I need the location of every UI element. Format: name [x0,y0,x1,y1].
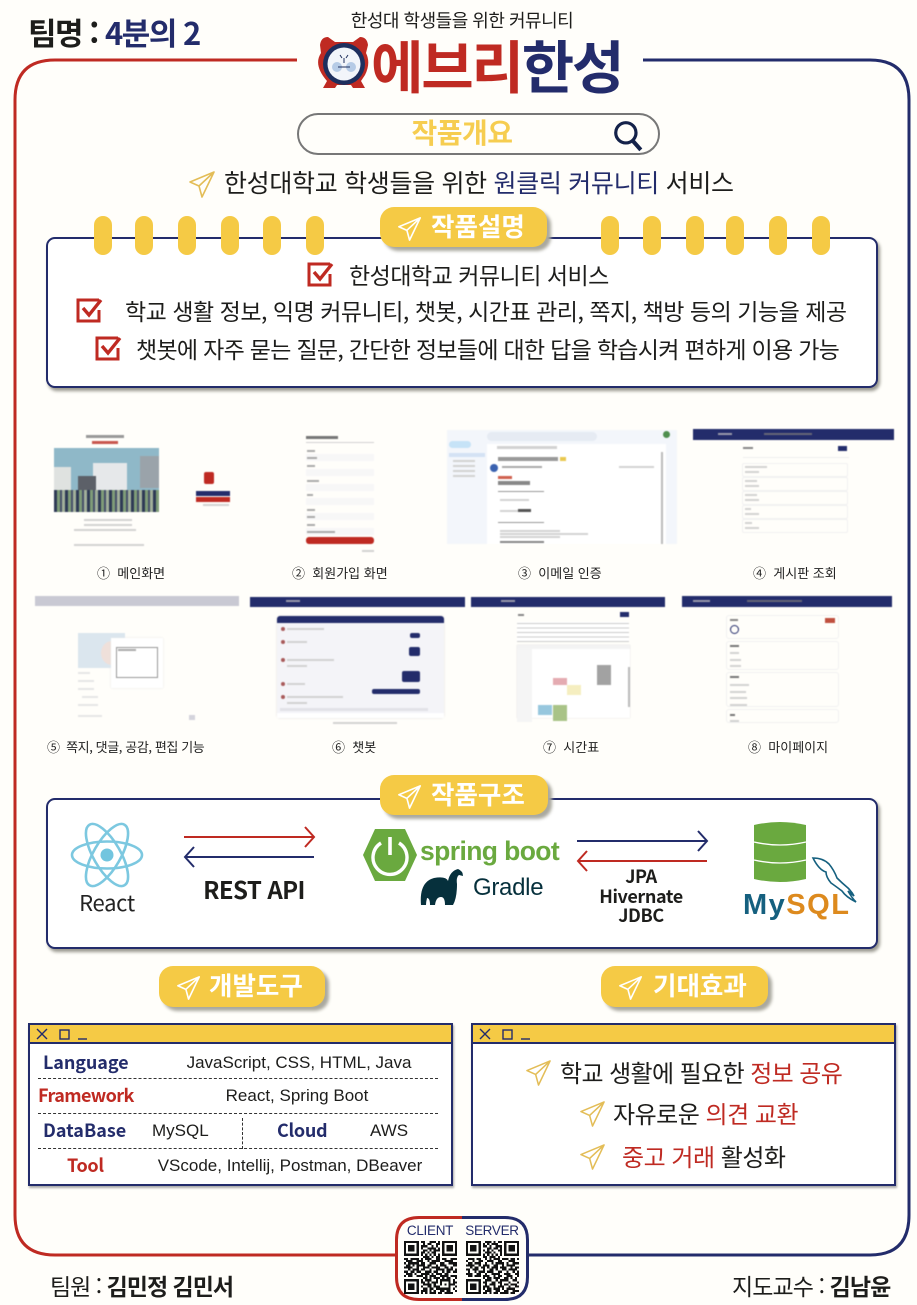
check item 3 [96,331,839,365]
screenshot 3: email [447,430,677,544]
label: React: React [79,886,135,918]
label: client: CLIENT [407,1223,453,1238]
QR code: server [466,1241,519,1294]
section heading: architecture: 작품구조 [431,775,525,812]
value: tool: VScode, Intellij, Postman, DBeaver [158,1156,422,1175]
caption 7: ⑦ 시간표 [543,737,599,756]
label: persistence stack [599,863,683,928]
value: framework: React, Spring Boot [226,1086,368,1105]
window title bar [473,1025,894,1044]
section heading: description: 작품설명 [431,207,525,244]
value: language: JavaScript, CSS, HTML, Java [187,1053,411,1072]
screenshot 6: chatbot [250,597,465,726]
panel: dev tools window [28,1023,453,1186]
caption 4: ④ 게시판 조회 [753,563,837,582]
label: persistence stack: JDBC [618,902,664,928]
icon: paper plane [580,1101,605,1127]
section heading: description [380,207,547,247]
row: framework: Framework [38,1082,134,1108]
label: REST API: REST API [203,871,305,906]
icon: Gradle elephant [420,869,463,905]
label: Gradle: Gradle [473,874,543,901]
panel: expected effects window [471,1023,896,1186]
arrow: result [576,850,707,872]
icon: magnifier [614,121,642,152]
icon: paper plane [398,785,422,809]
effect 1: 학교 생활에 필요한 정보 공유 [560,1054,842,1089]
icon: paper plane [177,976,200,1000]
search box heading [297,113,660,155]
text: 학교 생활 정보, 익명 커뮤니티, 챗봇, 시간표 관리, 쪽지, 책방 등의 기능을 제공 [125,293,847,327]
row: cloud: Cloud [277,1117,327,1143]
screenshot 1: main [28,431,232,551]
screenshot 8: my page [682,596,892,723]
section heading: dev tools: 개발도구 [209,966,303,1003]
label: server: SERVER [465,1223,519,1238]
icon: React logo [70,822,144,888]
screenshot 7: timetable [471,597,665,722]
advisor: 지도교수 : 김남윤 [732,1268,890,1302]
caption 6: ⑥ 챗봇 [332,737,376,756]
panel: architecture [46,798,878,949]
screenshot 4: board [693,429,894,541]
row: language: Language [43,1049,128,1075]
section heading: expected effects [601,966,768,1007]
tagline: 한성대학교 학생들을 위한 원클릭 커뮤니티 서비스 [224,164,734,200]
icon: paper plane [526,1060,551,1086]
window title bar [30,1025,451,1044]
icon: check [96,336,122,360]
icon: check [308,262,334,286]
label: persistence stack: JPA [625,863,657,889]
binder rings [94,216,830,255]
icon: clock mascot logo [318,37,368,88]
check item 1 [308,257,609,291]
text: 한성대학교 커뮤니티 서비스 [349,257,609,291]
arrow: query [577,830,708,852]
value: database: MySQL [152,1121,209,1140]
heading: project overview: 작품개요 [411,112,513,152]
title: 에브리한성 [371,23,622,105]
icon: paper plane [189,171,215,198]
caption 1: ① 메인화면 [97,563,165,582]
caption 5: ⑤ 쪽지, 댓글, 공감, 편집 기능 [47,737,204,756]
label: persistence stack: Hivernate [599,882,683,908]
icon: database cylinder [754,822,806,882]
screenshot 5: note [35,596,239,729]
row: database: DataBase [43,1117,126,1143]
section heading: architecture [380,775,548,815]
QR code: client [404,1241,457,1294]
arrow: response [184,846,314,868]
arrow: request [184,826,316,848]
icon: MySQL dolphin [812,857,856,903]
effect 3: 중고 거래 활성화 [622,1138,786,1173]
icon: check [76,298,102,322]
icon: paper plane [398,217,422,241]
caption 8: ⑧ 마이페이지 [748,737,828,756]
effect 2: 자유로운 의견 교환 [613,1095,798,1130]
section heading: dev tools [159,966,325,1007]
label: spring boot: spring boot [420,836,559,866]
check item 2 [76,293,847,327]
caption 3: ③ 이메일 인증 [518,563,602,582]
text: 챗봇에 자주 묻는 질문, 간단한 정보들에 대한 답을 학습시켜 편하게 이용 가능 [136,331,839,365]
caption 2: ② 회원가입 화면 [292,563,388,582]
section heading: expected effects: 기대효과 [653,966,747,1003]
subtitle: 한성대 학생들을 위한 커뮤니티 [351,7,573,33]
panel: project description [46,237,878,388]
team members: 팀원 : 김민정 김민서 [50,1268,233,1302]
row: tool: Tool [67,1152,104,1178]
icon: paper plane [580,1144,605,1170]
screenshot 2: sign up [300,430,378,556]
icon: paper plane [619,976,642,1000]
value: cloud: AWS [370,1121,408,1140]
icon: Spring power hexagon [363,829,417,881]
QR panel [395,1216,529,1301]
QR frame [395,1216,529,1301]
team name: 팀명 : 4분의 2 [28,9,200,54]
label: MySQL: MySQL [743,889,850,921]
